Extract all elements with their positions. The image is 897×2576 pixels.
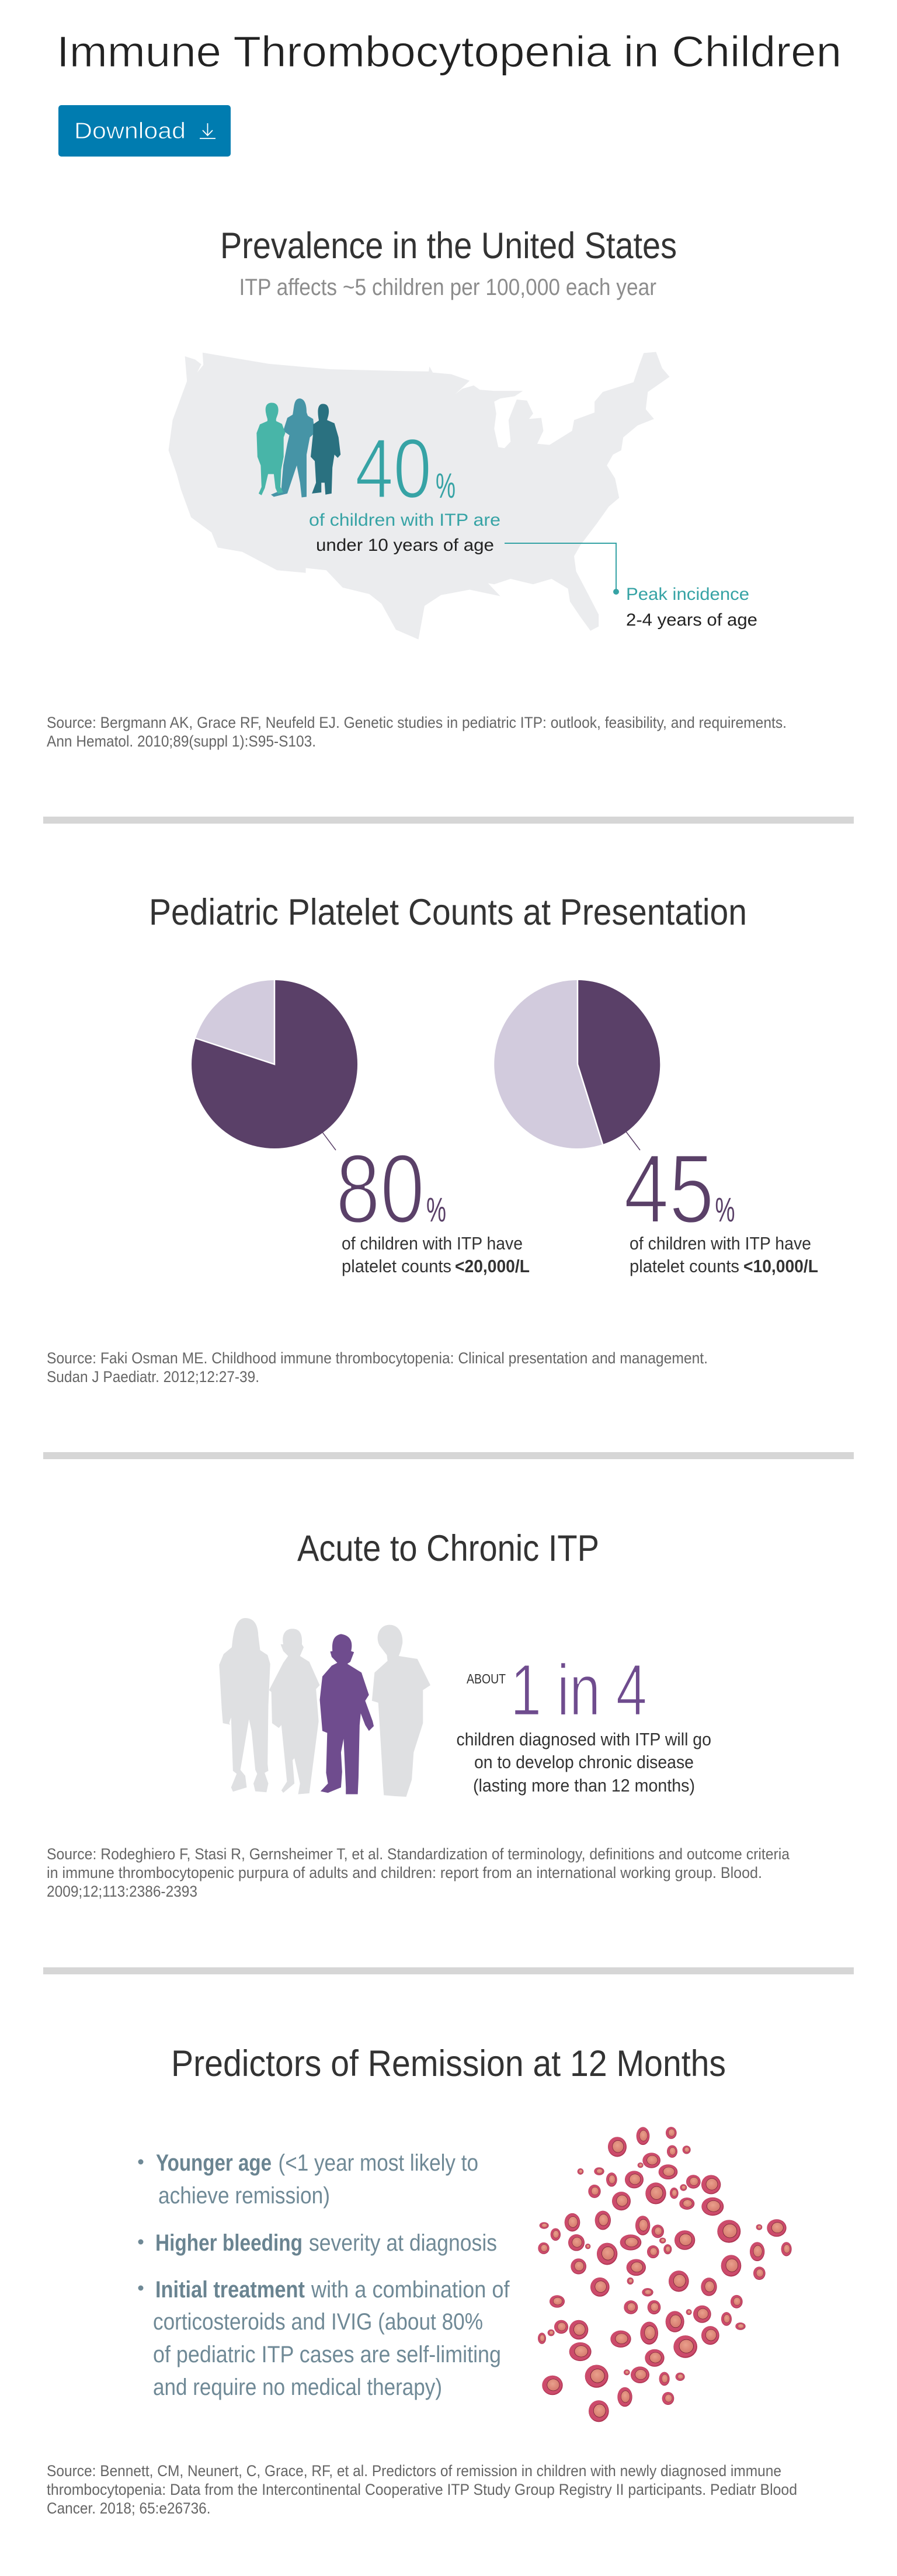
download button [58, 105, 231, 157]
source citation: Source: Bennett, CM, Neunert, C, Grace, RF, et al. Predictors of remission in children with newly diagnosed immune [47, 2462, 781, 2480]
statistic: 40 percent: % [436, 466, 456, 505]
statistic caption: of children with ITP are [309, 511, 500, 530]
statistic: 45 percent: % [715, 1191, 735, 1229]
caption: chronic disease: on to develop chronic disease [474, 1752, 694, 1772]
heading: prevalence: Prevalence in the United States [220, 225, 677, 266]
bullet: younger age: achieve remission) [158, 2183, 330, 2209]
source citation: Sudan J Paediatr. 2012;12:27-39. [47, 1368, 259, 1386]
caption: 80 percent: platelet counts [342, 1256, 451, 1276]
caption: 80 percent: <20,000/L [455, 1256, 530, 1276]
bullet: initial treatment: corticosteroids and IVIG (about 80% [153, 2309, 483, 2335]
bullet: younger age: (<1 year most likely to [278, 2150, 478, 2176]
caption: chronic disease: children diagnosed with ITP will go [457, 1729, 711, 1749]
panel: pediatric platelet counts [47, 892, 818, 1386]
title: Immune Thrombocytopenia in Children [57, 27, 842, 76]
bullet: initial treatment [138, 2277, 510, 2400]
panel: prevalence in the United States [47, 225, 787, 750]
source citation [47, 1349, 708, 1386]
bullet: younger age: Younger age [156, 2150, 272, 2176]
heading: predictors: Predictors of Remission at 12 Months [171, 2043, 726, 2084]
caption: 80 percent: of children with ITP have [342, 1233, 523, 1254]
source citation: thrombocytopenia: Data from the Intercontinental Cooperative ITP Study Group Registry II participants. Pediatr Blood [47, 2481, 797, 2498]
caption: chronic disease: (lasting more than 12 months) [473, 1775, 695, 1796]
statistic: about 1 in 4: 1 in 4 [510, 1650, 647, 1731]
bullet: higher bleeding: severity at diagnosis [309, 2230, 497, 2256]
source citation [47, 1845, 790, 1900]
pie chart: 80 percent [192, 980, 357, 1150]
caption: chronic disease [457, 1729, 711, 1796]
source citation [47, 714, 787, 750]
bullet: initial treatment: of pediatric ITP cases are self-limiting [153, 2342, 501, 2367]
icon: four children, one highlighted [219, 1618, 430, 1797]
source citation: Source: Faki Osman ME. Childhood immune thrombocytopenia: Clinical presentation and management. [47, 1349, 708, 1367]
download button: Download [74, 119, 186, 144]
source citation: Cancer. 2018; 65:e26736. [47, 2499, 210, 2517]
heading: platelet counts: Pediatric Platelet Counts at Presentation [149, 892, 747, 933]
statistic: about 1 in 4: ABOUT [467, 1671, 506, 1686]
caption: 45 percent [630, 1233, 818, 1276]
source citation: 2009;12;113:2386-2393 [47, 1883, 197, 1900]
panel: predictors of remission [47, 2043, 797, 2517]
bullet: higher bleeding [138, 2230, 497, 2256]
icon: three children silhouettes [256, 398, 340, 498]
heading: acute to chronic: Acute to Chronic ITP [297, 1528, 599, 1569]
caption: 80 percent [342, 1233, 530, 1276]
callout: peak incidence: 2-4 years of age [626, 610, 757, 630]
pie chart: 45 percent [494, 980, 660, 1150]
panel: acute to chronic ITP [47, 1528, 790, 1900]
source citation: Ann Hematol. 2010;89(suppl 1):S95-S103. [47, 732, 316, 750]
callout: peak incidence: Peak incidence [626, 585, 749, 604]
caption: 45 percent: of children with ITP have [630, 1233, 811, 1254]
source citation: Source: Rodeghiero F, Stasi R, Gernsheimer T, et al. Standardization of terminology, definitions and outcome criteria [47, 1845, 790, 1863]
callout arrow: leader line to peak incidence [505, 543, 619, 595]
callout: peak incidence [626, 585, 757, 630]
bullet: initial treatment: with a combination of [311, 2277, 510, 2303]
statistic: 45 percent: 45 [624, 1134, 714, 1244]
caption: 45 percent: platelet counts [630, 1256, 739, 1276]
statistic caption [309, 511, 500, 555]
statistic: 40 percent: 40 [355, 421, 432, 516]
statistic caption: under 10 years of age [316, 536, 494, 555]
map of the United States [169, 352, 670, 640]
source citation: in immune thrombocytopenic purpura of adults and children: report from an international working group. Blood. [47, 1864, 762, 1881]
statistic: 80 percent: % [426, 1191, 446, 1229]
bullet: initial treatment: and require no medical therapy) [153, 2374, 442, 2400]
caption: 45 percent: <10,000/L [743, 1256, 818, 1276]
bullet: higher bleeding: Higher bleeding [155, 2230, 303, 2256]
subheading: incidence: ITP affects ~5 children per 100,000 each year [239, 275, 656, 300]
source citation: Source: Bergmann AK, Grace RF, Neufeld EJ. Genetic studies in pediatric ITP: outlook, feasibility, and requirements. [47, 714, 787, 731]
statistic: about 1 in 4 [467, 1650, 647, 1731]
bullet: younger age [138, 2150, 478, 2209]
bullet: initial treatment: Initial treatment [155, 2277, 305, 2303]
source citation [47, 2462, 797, 2517]
statistic: 80 percent: 80 [336, 1134, 425, 1244]
illustration: platelets [538, 2127, 792, 2422]
